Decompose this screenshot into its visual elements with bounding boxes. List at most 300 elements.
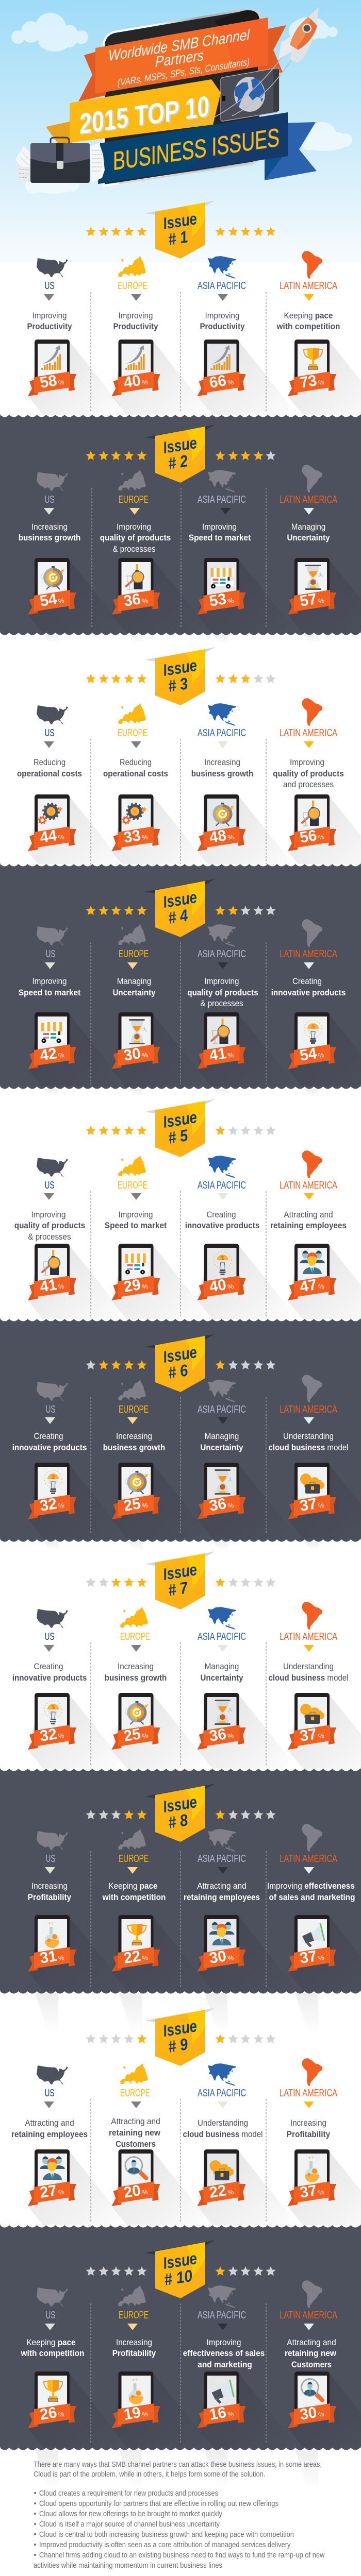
tablet 54%: %	[318, 1051, 325, 1059]
issue text: quality of products	[187, 988, 258, 997]
label: Asia Pacific: ASIA PACIFIC	[198, 1180, 246, 1191]
panel: issue 3	[0, 631, 361, 916]
issue 7 ribbon	[145, 1551, 215, 1609]
tablet 19%: %	[141, 2410, 149, 2418]
rating stars	[86, 1126, 275, 1135]
column: Asia Pacific	[183, 2063, 291, 2270]
small tablet with globe	[221, 68, 279, 121]
arrow	[218, 1417, 228, 1424]
issue text: retaining new	[109, 2128, 161, 2138]
issue 7 ribbon: # 7	[167, 1578, 190, 1600]
column: Latin America	[280, 465, 361, 679]
issue text: Reducing	[120, 757, 152, 767]
issue text: Increasing	[116, 1431, 152, 1441]
tablet 37%	[288, 1463, 361, 1584]
tablet 25%: %	[141, 1501, 149, 1510]
issue text: Creating	[292, 976, 322, 986]
map: Europe	[118, 256, 146, 277]
label: US: US	[45, 2310, 56, 2321]
issue text	[21, 2337, 85, 2358]
issue text: Creating	[34, 1662, 63, 1671]
arrow	[131, 2102, 141, 2108]
bullet list: Cloud opens opportunity for partners that are effective in rolling out new offerings	[39, 2499, 278, 2508]
arrow	[127, 962, 138, 969]
issue text	[112, 2337, 156, 2358]
label: Europe: EUROPE	[119, 1853, 149, 1865]
issue text: and processes	[283, 779, 334, 789]
tablet 22%	[111, 1915, 205, 2036]
header illustration	[11, 7, 352, 194]
arrow	[304, 294, 314, 301]
arrow	[45, 2324, 55, 2330]
device frame	[104, 10, 260, 185]
label: Latin America: LATIN AMERICA	[280, 727, 337, 739]
tablet 30%: %	[141, 1051, 149, 1059]
tablet 56%	[288, 794, 361, 916]
map: US	[37, 258, 68, 277]
tablet 54%	[288, 1012, 361, 1133]
issue text	[109, 2116, 161, 2149]
issue 8 ribbon: # 8	[167, 1810, 189, 1832]
tablet 16%: %	[227, 2410, 234, 2418]
tablet 30%: %	[227, 1954, 234, 1962]
tablet 36%: 36	[208, 1725, 227, 1745]
arrow	[304, 1867, 314, 1874]
map: US	[37, 1158, 68, 1177]
intro paragraph: Cloud is part of the problem, while in others, it helps form some of the solution.	[34, 2470, 265, 2479]
tablet 40%	[111, 340, 205, 461]
label: Asia Pacific: ASIA PACIFIC	[198, 1853, 246, 1865]
arrow	[127, 2324, 138, 2330]
arrow	[131, 294, 141, 301]
map: US	[37, 472, 68, 491]
arrow	[218, 2324, 228, 2330]
issue text: Speed to market	[105, 1221, 167, 1230]
issue text: innovative products	[12, 1443, 87, 1452]
label: US: US	[44, 1180, 55, 1191]
issue text: Improving	[119, 1210, 153, 1219]
issue text	[27, 311, 72, 331]
arrow	[45, 1417, 55, 1424]
map: Europe	[118, 924, 146, 945]
tablet 58%: %	[58, 378, 65, 386]
label: Europe: EUROPE	[118, 1180, 147, 1191]
column: Asia Pacific	[197, 1607, 291, 1814]
label: Latin America: LATIN AMERICA	[280, 494, 337, 505]
issue text	[287, 522, 330, 543]
map: South America	[302, 698, 322, 726]
issue text: retaining employees	[11, 2129, 88, 2139]
arrow	[304, 508, 314, 515]
tablet 41%	[197, 1012, 291, 1133]
issue text: Uncertainty	[200, 1673, 243, 1683]
tablet 57%	[288, 558, 361, 679]
briefcase with papers	[15, 138, 105, 183]
issue text: cloud business model	[183, 2129, 263, 2139]
tablet 30%: 30	[299, 2404, 318, 2424]
issue text: and marketing	[198, 2360, 252, 2369]
tablet 73%	[288, 340, 361, 461]
tablet 30%: 30	[122, 1045, 142, 1064]
tablet 25%	[111, 1463, 205, 1584]
tablet 25%	[111, 1693, 205, 1814]
issue 4 ribbon	[145, 879, 215, 937]
map: US	[37, 705, 68, 724]
arrow	[304, 741, 314, 748]
tablet 30%: 30	[208, 1947, 227, 1967]
map: US	[37, 2065, 68, 2084]
label: Latin America: LATIN AMERICA	[280, 2088, 337, 2099]
issue text	[267, 1881, 355, 1902]
issue text	[12, 1662, 87, 1683]
label: Europe: EUROPE	[119, 494, 149, 505]
tablet 48%: %	[227, 833, 234, 841]
issue text: innovative products	[271, 988, 346, 997]
tablet 22%: 22	[122, 1947, 142, 1967]
issue text: Reducing	[34, 757, 65, 767]
issue text: cloud business model	[268, 1673, 349, 1683]
issue 1 ribbon	[145, 200, 215, 259]
tablet 73%: 73	[299, 372, 318, 392]
map: Asia	[208, 1829, 236, 1852]
issue text: Customers	[291, 2360, 332, 2369]
map: Europe	[118, 1380, 146, 1401]
issue text: Improving	[32, 311, 67, 320]
tablet 32%: 32	[39, 1495, 58, 1515]
issue 1 ribbon: # 1	[167, 227, 189, 249]
issue text	[19, 522, 80, 543]
tablet 20%: %	[141, 2188, 149, 2196]
issue 9 ribbon: Issue	[161, 2016, 198, 2040]
label: US: US	[45, 948, 56, 960]
tablet 22%: 22	[208, 2182, 227, 2201]
panel: issue 4	[0, 862, 361, 1133]
tablet 27%	[28, 2149, 121, 2270]
arrow	[131, 1193, 141, 1200]
column: US	[21, 2287, 121, 2493]
issue text: & processes	[200, 998, 243, 1008]
column: Europe	[102, 1829, 205, 2036]
tablet 36%: 36	[122, 590, 142, 610]
label: Asia Pacific: ASIA PACIFIC	[198, 727, 246, 739]
tablet 29%	[111, 1244, 205, 1365]
label: US: US	[44, 1631, 55, 1642]
rating stars	[86, 451, 275, 460]
tablet 25%: %	[141, 1732, 149, 1740]
issue 2 ribbon	[145, 425, 215, 483]
bullet list: Cloud is itself a major source of channel business uncertainty	[39, 2520, 220, 2529]
tablet 29%: %	[141, 1282, 149, 1291]
issue text: with competition	[21, 2348, 85, 2358]
map: Europe	[118, 470, 146, 491]
issue text: Creating	[34, 1431, 63, 1441]
column: Latin America	[280, 2058, 361, 2270]
column: Europe	[111, 924, 205, 1133]
panel: issue 5	[0, 1084, 361, 1365]
tablet 41%	[28, 1244, 121, 1365]
issue 2 ribbon: Issue	[161, 433, 198, 457]
tablet 32%: %	[58, 1732, 65, 1740]
issue text: innovative products	[185, 1221, 259, 1230]
tablet 30%	[288, 2371, 361, 2493]
issue text: Managing	[205, 1662, 239, 1671]
issue text: innovative products	[12, 1673, 87, 1683]
tablet 48%: 48	[208, 827, 227, 846]
tablet 31%: %	[58, 1954, 65, 1962]
tablet 37%	[288, 1915, 361, 2036]
issue 4 ribbon: # 4	[167, 906, 189, 927]
column: Latin America	[273, 698, 361, 916]
issue text	[103, 757, 168, 778]
label: Europe: EUROPE	[118, 280, 147, 292]
issue 9 ribbon	[145, 2008, 215, 2066]
issue text	[183, 2118, 263, 2139]
issue text: Improving	[205, 311, 239, 320]
column: Europe	[105, 1607, 205, 1814]
rating stars	[86, 227, 275, 236]
arrow	[218, 1193, 228, 1200]
issue text: Productivity	[200, 321, 245, 331]
label: Latin America: LATIN AMERICA	[280, 1404, 337, 1415]
column: Latin America	[268, 1602, 361, 1814]
issue text: Uncertainty	[287, 533, 330, 543]
issue text	[273, 757, 344, 789]
label: Europe: EUROPE	[119, 948, 149, 960]
arrow	[45, 962, 55, 969]
tablet 37%: 37	[299, 2182, 318, 2201]
arrow	[218, 294, 228, 301]
heading: worldwide SMB channel partners: Partners	[155, 47, 204, 71]
column: Asia Pacific	[187, 924, 291, 1133]
label: Latin America: LATIN AMERICA	[280, 1853, 337, 1865]
issue text: Attracting and	[284, 1210, 333, 1219]
issue text: Uncertainty	[200, 1443, 243, 1452]
arrow	[218, 1645, 228, 1652]
arrow	[127, 1867, 138, 1874]
issue text: quality of products	[14, 1221, 85, 1230]
column: US	[17, 705, 121, 916]
issue text: Improving	[117, 522, 151, 532]
tablet 37%: %	[318, 1501, 325, 1510]
issue text	[102, 1881, 166, 1902]
tablet 56%: 56	[299, 827, 318, 846]
tablet 19%	[111, 2371, 205, 2493]
tablet 37%	[288, 1693, 361, 1814]
arrow	[218, 1867, 228, 1874]
issue text: Understanding	[283, 1431, 334, 1441]
intro paragraph	[34, 2460, 322, 2479]
issue text: Managing	[205, 1431, 239, 1441]
rating stars	[86, 1578, 275, 1587]
arrow	[220, 508, 231, 515]
issue text: operational costs	[17, 769, 82, 778]
tablet 20%	[111, 2149, 205, 2270]
issue text	[276, 311, 340, 331]
rating stars	[86, 2034, 275, 2043]
tablet 37%: %	[318, 1954, 325, 1962]
issue text: retaining employees	[270, 1221, 347, 1230]
panel: issue 1	[27, 200, 361, 461]
label: Latin America: LATIN AMERICA	[280, 280, 337, 292]
issue text: Improving effectiveness	[267, 1881, 355, 1891]
issue text: Profitability	[287, 2129, 331, 2139]
tablet 16%: 16	[208, 2404, 227, 2424]
issue text: quality of products	[100, 533, 171, 543]
issue text: Increasing	[118, 1662, 154, 1671]
issue text: Profitability	[28, 1892, 72, 1902]
issue text: Keeping pace	[284, 311, 333, 320]
tablet 42%	[28, 1012, 121, 1133]
tablet 27%: 27	[39, 2182, 58, 2201]
arrow	[304, 2324, 314, 2330]
issue text: quality of products	[273, 769, 344, 778]
cloud: under briefcase	[25, 172, 79, 194]
column: US	[28, 1831, 121, 2036]
column: Latin America	[280, 2280, 361, 2493]
tablet 16%	[197, 2371, 291, 2493]
arrow	[44, 2102, 54, 2108]
issue text: operational costs	[103, 769, 168, 778]
tablet 33%	[111, 794, 205, 916]
issue text: Attracting and	[197, 1881, 247, 1891]
issue 5 ribbon	[145, 1099, 215, 1157]
issue 3 ribbon: Issue	[161, 656, 198, 680]
issue text: Improving	[206, 2337, 241, 2347]
tablet 29%: 29	[122, 1276, 142, 1296]
issue text: Understanding	[198, 2118, 248, 2128]
tablet 25%: 25	[122, 1725, 142, 1745]
tablet 32%: 32	[39, 1725, 58, 1745]
issue text	[17, 757, 82, 778]
issue 10 ribbon: Issue	[161, 2249, 198, 2273]
issue 6 ribbon: # 6	[167, 1361, 189, 1382]
tablet 54%: 54	[39, 590, 58, 610]
ribbon: blue business issues: BUSINESS ISSUES	[113, 123, 280, 176]
tablet 36%	[197, 1693, 291, 1814]
label: Asia Pacific: ASIA PACIFIC	[198, 2088, 246, 2099]
tablet 30%: %	[318, 2410, 325, 2418]
sky background	[0, 0, 361, 263]
arrow	[44, 1193, 54, 1200]
tablet 40%: %	[141, 378, 149, 386]
column: Europe	[100, 470, 205, 679]
column: Latin America	[267, 1824, 361, 2036]
tablet 66%	[197, 340, 291, 461]
issue 8 ribbon	[145, 1784, 215, 1842]
panel: footer	[0, 2446, 361, 2576]
tablet 19%: 19	[122, 2404, 142, 2424]
map: Asia	[208, 1156, 236, 1178]
bullet list: activities while maintaining momentum in current business lines	[34, 2561, 222, 2570]
map: Europe	[120, 1607, 148, 1628]
column: Latin America	[268, 1375, 361, 1584]
tablet 54%	[28, 558, 121, 679]
arrow	[218, 962, 228, 969]
issue 9 ribbon: # 9	[167, 2035, 189, 2056]
bullet list	[34, 2489, 325, 2570]
map: Asia	[208, 703, 236, 726]
label: Asia Pacific: ASIA PACIFIC	[198, 2310, 246, 2321]
map: Asia	[208, 470, 236, 493]
tablet 26%: %	[58, 2410, 65, 2418]
ribbon: yellow 2015 top 10	[46, 79, 221, 149]
label: US: US	[44, 727, 55, 739]
column: US	[27, 258, 121, 461]
issue text: Improving	[119, 311, 153, 320]
panel: issue 10	[0, 2223, 361, 2493]
column: US	[12, 1609, 121, 1814]
tablet 41%: 41	[39, 1276, 58, 1296]
column: Europe	[105, 1156, 205, 1365]
ribbon: yellow 2015 top 10: 2015 TOP 10	[79, 90, 209, 140]
issue text: Keeping pace	[27, 2337, 75, 2347]
issue 4 ribbon: Issue	[161, 888, 198, 911]
tablet 37%	[288, 2149, 361, 2270]
issue text: Attracting and	[111, 2116, 160, 2126]
column: Europe	[111, 256, 205, 461]
arrow	[218, 2102, 228, 2108]
issue text	[270, 1210, 347, 1230]
label: US: US	[45, 1853, 56, 1865]
tablet 58%: 58	[39, 372, 58, 392]
issue text	[268, 1431, 349, 1452]
issue text: Increasing	[116, 2337, 152, 2347]
issue text: Speed to market	[189, 533, 251, 543]
panel: issue 2	[0, 413, 361, 679]
issue text	[268, 1662, 349, 1683]
tablet 53%	[197, 558, 291, 679]
issue text	[100, 522, 171, 554]
tablet 26%	[28, 2371, 121, 2493]
issue text	[191, 757, 253, 778]
tablet 47%: 47	[299, 1276, 318, 1296]
issue 2 ribbon: # 2	[167, 451, 189, 473]
issue text: Managing	[117, 976, 151, 986]
tablet 37%: %	[318, 1732, 325, 1740]
issue 5 ribbon: Issue	[161, 1108, 198, 1131]
map: Europe	[118, 1156, 146, 1177]
tablet 37%: 37	[299, 1725, 318, 1745]
issue text	[105, 1662, 167, 1683]
column: Asia Pacific	[183, 2285, 291, 2493]
label: Asia Pacific: ASIA PACIFIC	[198, 948, 246, 960]
tablet 57%: %	[318, 597, 325, 605]
rating stars	[86, 1360, 275, 1369]
rocket	[183, 7, 319, 125]
map: South America	[302, 919, 322, 947]
issue text: retaining employees	[184, 1892, 260, 1902]
column: Latin America	[270, 1150, 361, 1365]
issue text	[14, 1210, 85, 1242]
tablet 40%: %	[227, 1282, 234, 1291]
panel: issue 9	[0, 1989, 361, 2270]
issue 6 ribbon	[145, 1334, 215, 1392]
tablet 66%: %	[227, 378, 234, 386]
map: Asia	[208, 924, 236, 947]
map: Asia	[208, 2285, 236, 2308]
tablet 37%: %	[318, 2188, 325, 2196]
column: Asia Pacific	[184, 1829, 291, 2036]
column: US	[12, 1382, 121, 1584]
tablet 20%: 20	[122, 2182, 142, 2201]
arrow	[44, 508, 54, 515]
issue text	[11, 2118, 88, 2139]
label: US: US	[44, 280, 55, 292]
issue text	[184, 1881, 260, 1902]
issue text: retaining new	[285, 2348, 337, 2358]
map: US	[37, 1831, 68, 1850]
map: US	[37, 926, 68, 945]
